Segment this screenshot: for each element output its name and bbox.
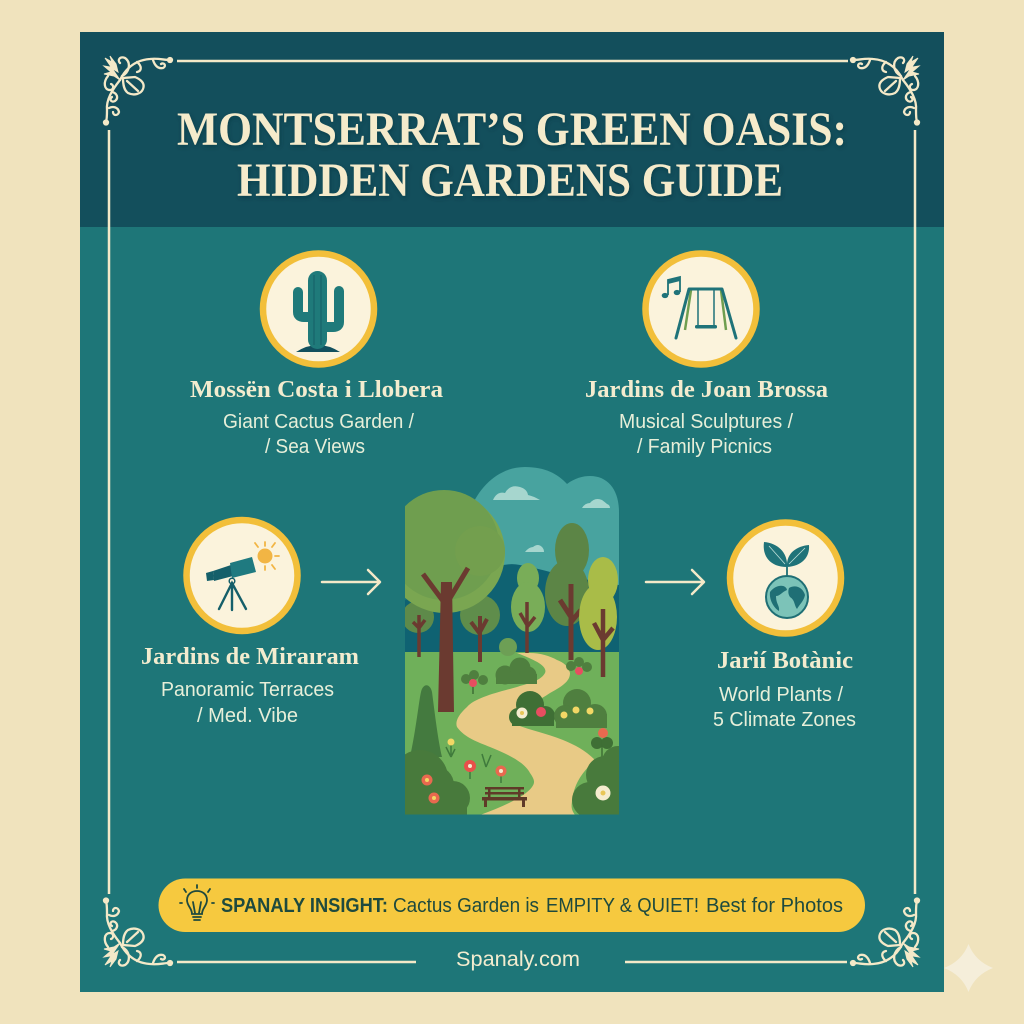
corner ornament: bottom right [851, 898, 919, 967]
sky [475, 467, 619, 585]
title: MONTSERRAT’S GREEN OASIS: [177, 103, 847, 156]
description: world plants: World Plants / [719, 683, 843, 706]
icon: swing and music notes [646, 254, 756, 364]
description: musical sculptures [619, 410, 793, 458]
insight text: Cactus Garden is [393, 894, 539, 917]
insight text: EMPITY & QUIET! [546, 894, 699, 917]
corner ornament: bottom left [104, 898, 172, 967]
description: panoramic terraces: Panoramic Terraces [161, 678, 334, 701]
hills [405, 564, 619, 652]
bench [482, 787, 527, 807]
heading: Mossen Costa i Llobera: Mossën Costa i Llobera [190, 376, 443, 403]
description: panoramic terraces [161, 678, 334, 727]
right foreground bush [572, 746, 619, 814]
panel: main teal card [80, 32, 944, 992]
frame lines [109, 61, 915, 962]
light green tree [511, 563, 545, 653]
icon: globe with sprout [730, 522, 841, 634]
back trees [402, 595, 500, 662]
description: musical sculptures: Musical Sculptures / [619, 410, 793, 433]
title: HIDDEN GARDENS GUIDE [237, 154, 783, 207]
item: Jardins de Miraram [141, 520, 359, 727]
callout: Spanaly insight [158, 878, 865, 932]
description: world plants [713, 683, 856, 731]
ground [405, 652, 619, 815]
big foreground tree [405, 490, 505, 712]
heading: Jardins de Miraram: Jardins de Miraıram [141, 643, 359, 670]
insight text: Best for Photos [706, 894, 843, 917]
illustration: central garden scene [405, 467, 619, 814]
corner ornament: top right [851, 56, 919, 124]
description: cactus garden [223, 410, 414, 458]
clouds [493, 486, 610, 552]
left foreground bush [405, 752, 470, 814]
item: Jardi Botanic [713, 522, 856, 731]
icon: corner sparkle [944, 944, 993, 992]
corner ornament: top left [104, 56, 172, 124]
description: cactus garden: / Sea Views [265, 435, 365, 458]
panel: title band [80, 32, 944, 227]
icon: light bulb [180, 885, 214, 920]
shrubs [496, 638, 607, 728]
title [177, 103, 847, 207]
icon: telescope and sun [186, 520, 298, 631]
description: cactus garden: Giant Cactus Garden / [223, 410, 414, 433]
item: Jardins de Joan Brossa [585, 254, 828, 458]
insight text [221, 894, 843, 917]
cypress [410, 685, 442, 757]
item: Mossen Costa i Llobera [190, 254, 443, 458]
heading: Jarii Botanic: Jarií Botànic [717, 647, 853, 674]
icon: cactus [263, 254, 374, 364]
lime tree [579, 557, 618, 677]
winding path [456, 653, 595, 815]
arrow: garden to right item [646, 570, 704, 594]
description: world plants: 5 Climate Zones [713, 708, 856, 731]
small flower plants [461, 657, 613, 758]
footer: website: Spanaly.com [456, 947, 580, 971]
heading: Jardins de Joan Brossa: Jardins de Joan Brossa [585, 376, 828, 403]
meadow flowers [446, 738, 506, 783]
tall dark tree [545, 523, 589, 660]
insight text: SPANALY INSIGHT: [221, 894, 388, 917]
shrub flowers [516, 706, 594, 718]
description: musical sculptures: / Family Picnics [637, 435, 772, 458]
description: panoramic terraces: / Med. Vibe [197, 704, 298, 727]
arrow: left item to garden [322, 570, 380, 594]
